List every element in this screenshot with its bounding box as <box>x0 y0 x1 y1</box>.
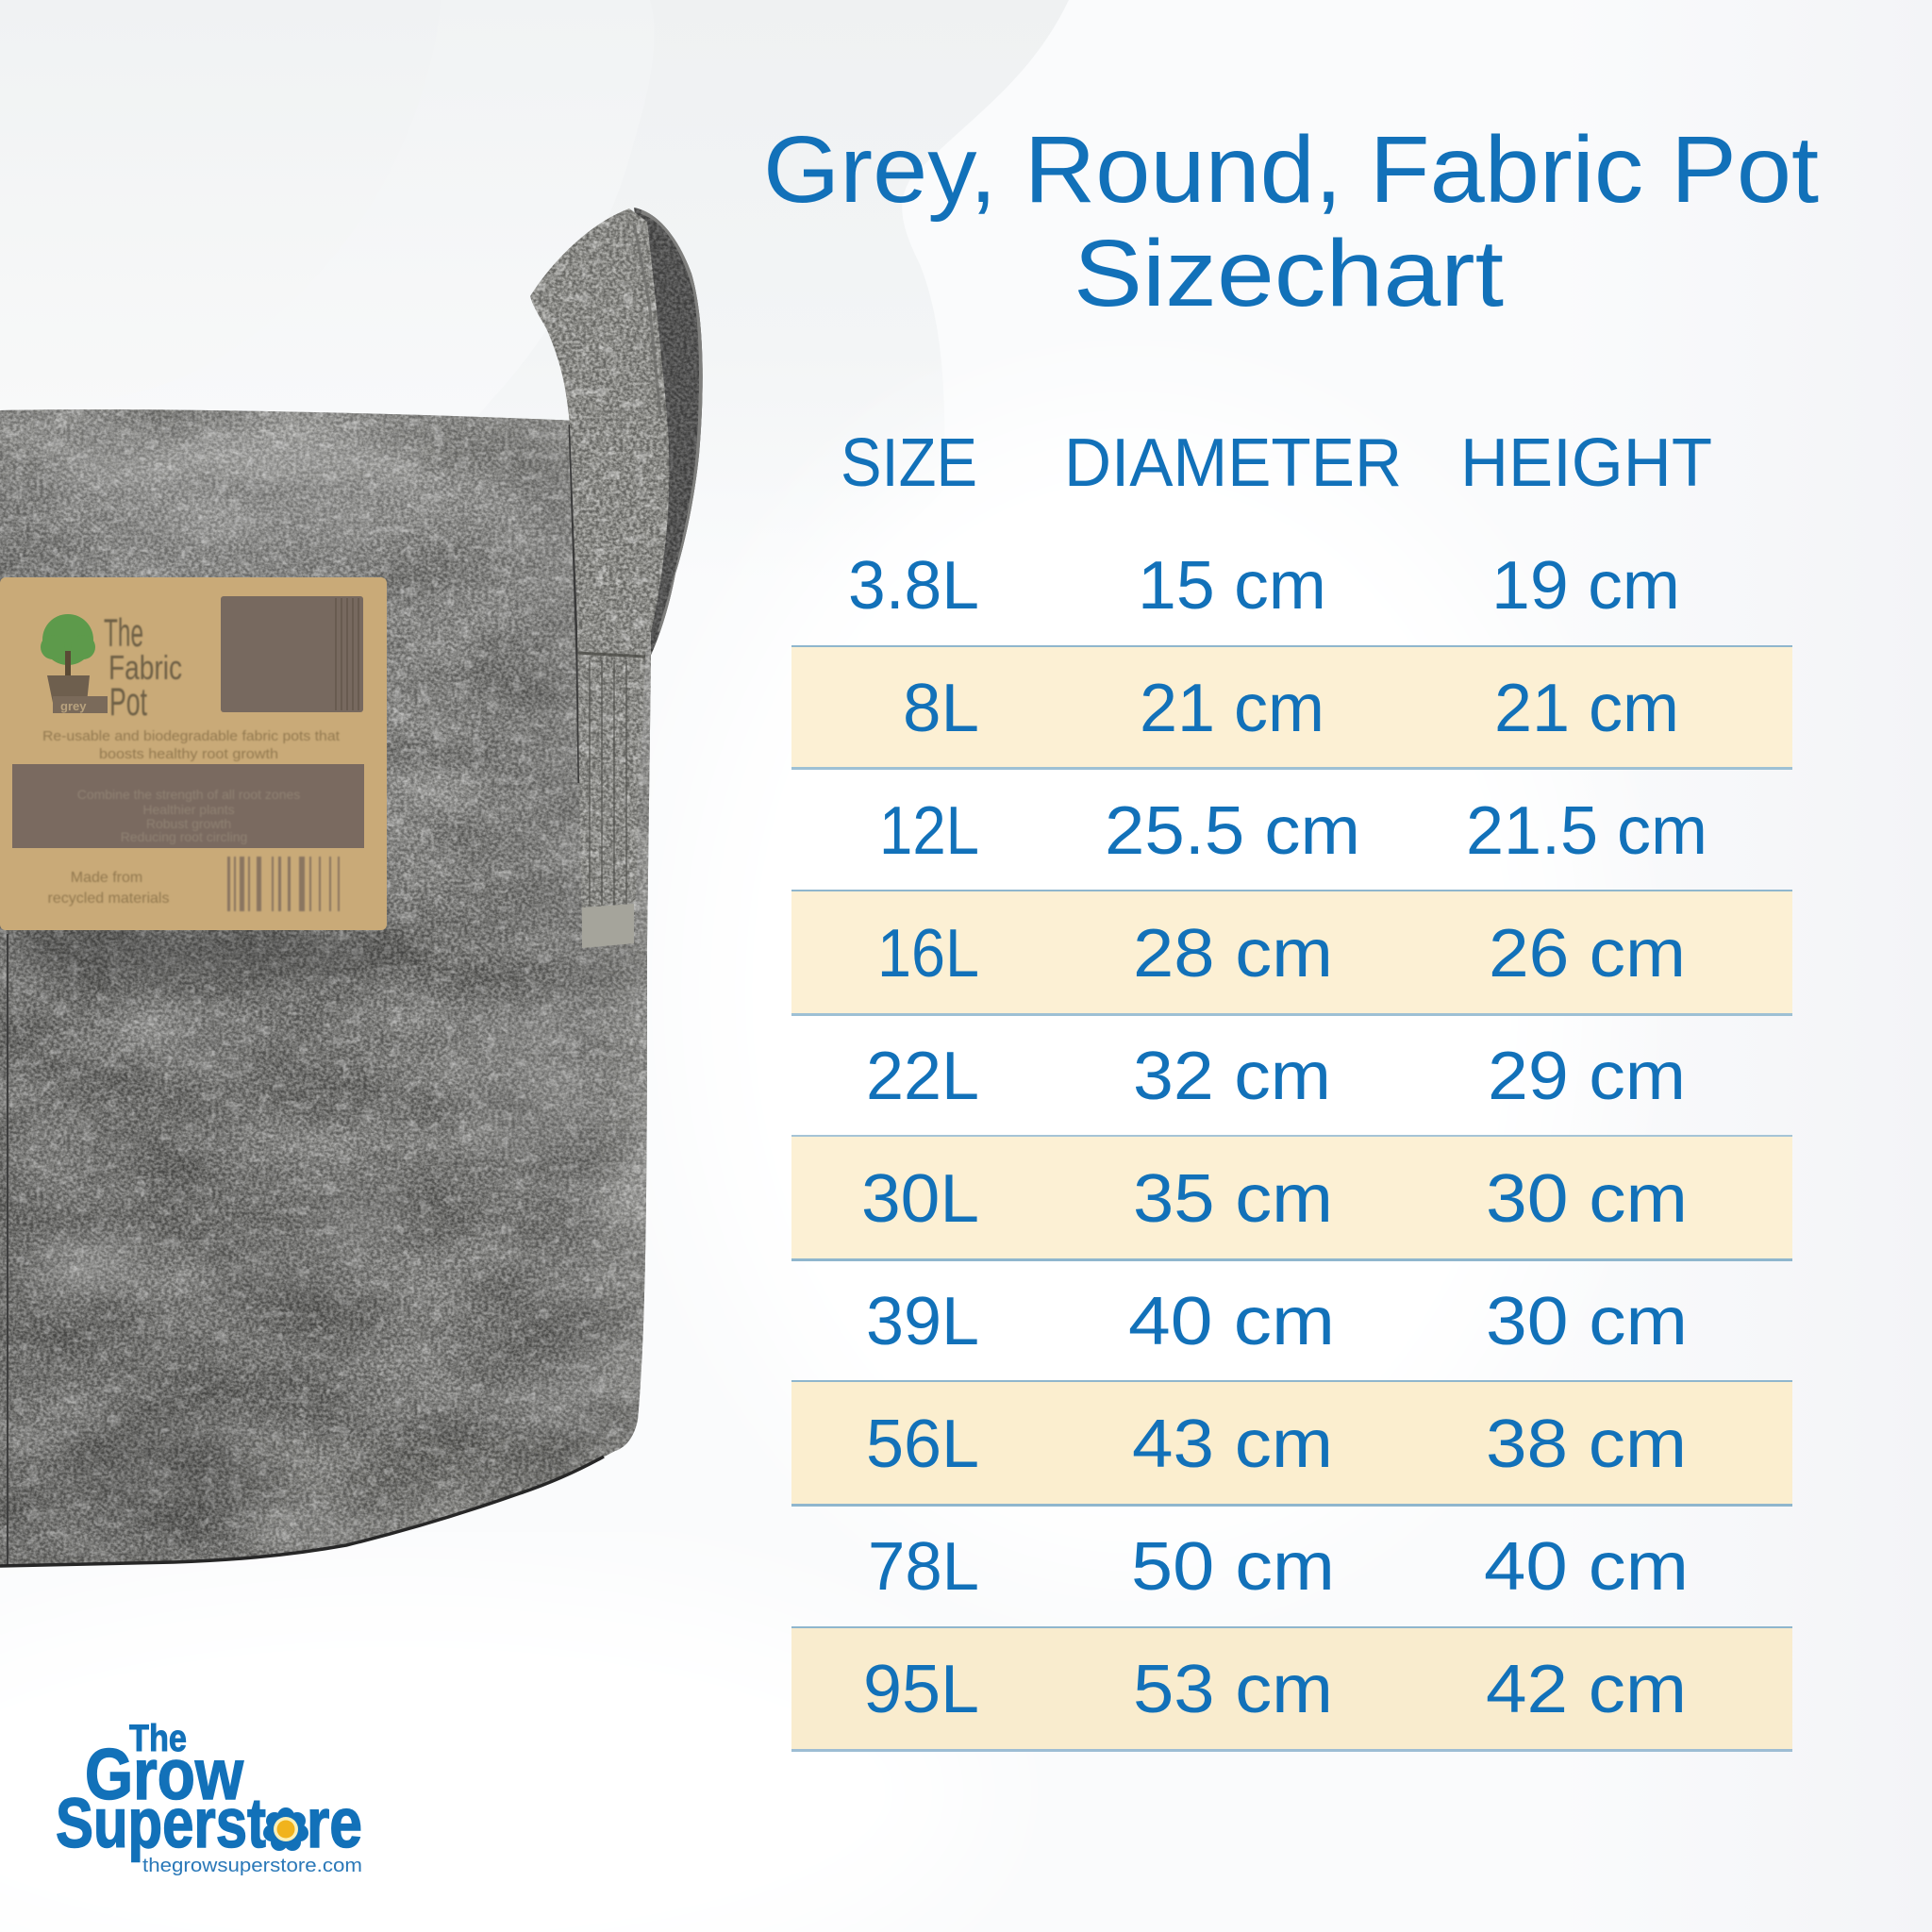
table row: 78L: 50 cm <box>1131 1529 1335 1605</box>
table row: 30L: 30 cm <box>1486 1161 1688 1237</box>
label benefit strip <box>12 764 364 848</box>
label benefit strip: Robust growth <box>146 816 231 831</box>
table row: 78L: 78L <box>868 1529 979 1605</box>
table row: 3.8L: 15 cm <box>1138 548 1326 624</box>
product label <box>0 577 387 930</box>
label brand name: Pot <box>109 679 147 724</box>
table row: 30L <box>791 1137 1792 1261</box>
label description <box>42 728 341 762</box>
table row: 22L <box>791 1039 1792 1138</box>
logo: The Grow Superstore <box>56 1718 362 1862</box>
table row: 30L: 35 cm <box>1133 1161 1333 1237</box>
table row: 56L: 43 cm <box>1132 1407 1333 1482</box>
table header: SIZE <box>841 425 977 501</box>
table row: 16L: 26 cm <box>1489 916 1686 991</box>
title: Grey, Round, Fabric Pot <box>763 117 1819 223</box>
label brand name <box>104 610 182 724</box>
table row: 12L: 25.5 cm <box>1105 793 1360 869</box>
table row: 95L: 42 cm <box>1486 1652 1687 1727</box>
title: Sizechart <box>1074 221 1504 326</box>
label brand name: The <box>104 610 143 655</box>
table row: 16L: 16L <box>877 916 979 991</box>
table header <box>841 425 1712 501</box>
table row: 39L: 30 cm <box>1486 1284 1688 1359</box>
fabric pot photo <box>0 203 712 1575</box>
logo: The Grow Superstore: re <box>307 1784 362 1862</box>
table row: 56L <box>791 1382 1792 1507</box>
table row: 78L: 40 cm <box>1484 1529 1689 1605</box>
table row: 3.8L: 3.8L <box>848 548 979 624</box>
label description: Re-usable and biodegradable fabric pots that <box>42 728 341 744</box>
table row: 16L <box>791 891 1792 1016</box>
label recycled note: Made from <box>71 870 142 886</box>
table row: 39L: 40 cm <box>1128 1284 1335 1359</box>
table row: 22L: 29 cm <box>1488 1039 1686 1114</box>
table row: 3.8L <box>791 548 1792 648</box>
pot handle strap <box>524 203 675 953</box>
table row: 12L: 12L <box>879 793 979 869</box>
table row: 30L: 30L <box>861 1161 979 1237</box>
table row: 56L: 56L <box>866 1407 979 1482</box>
label description: boosts healthy root growth <box>99 746 278 762</box>
table header: HEIGHT <box>1460 425 1712 501</box>
label tree logo <box>41 614 108 713</box>
pot body <box>0 406 660 1575</box>
logo url: thegrowsuperstore.com <box>142 1855 362 1876</box>
table row: 95L: 95L <box>863 1652 979 1727</box>
table row: 8L: 21 cm <box>1140 671 1324 746</box>
table row: 56L: 38 cm <box>1486 1407 1687 1482</box>
table header: DIAMETER <box>1064 425 1402 501</box>
label barcode <box>227 857 340 911</box>
table row: 3.8L: 19 cm <box>1491 548 1680 624</box>
strap shadow <box>571 425 580 783</box>
label brand name: Fabric <box>108 648 182 687</box>
table row: 39L: 39L <box>866 1284 979 1359</box>
pot handle back <box>634 208 703 655</box>
label benefit strip: Healthier plants <box>142 802 235 817</box>
table row: 8L <box>791 647 1792 770</box>
label recycled note <box>48 870 169 907</box>
table row: 95L: 53 cm <box>1133 1652 1333 1727</box>
label benefit strip: Combine the strength of all root zones <box>77 787 300 802</box>
icon: flower o <box>263 1807 308 1851</box>
table row: 22L: 32 cm <box>1133 1039 1331 1114</box>
logo: The Grow Superstore: Grow <box>85 1735 244 1815</box>
title <box>763 117 1819 326</box>
label benefit strip: Reducing root circling <box>121 829 247 844</box>
logo: The Grow Superstore: Superst <box>56 1784 266 1862</box>
table row: 22L: 22L <box>866 1039 979 1114</box>
label recycled note: recycled materials <box>48 891 169 907</box>
table row: 39L <box>791 1284 1792 1383</box>
table row: 8L: 21 cm <box>1494 671 1679 746</box>
table row: 95L <box>791 1628 1792 1752</box>
pot side seam <box>7 934 8 1566</box>
label tree logo: grey <box>60 699 87 713</box>
table row: 78L <box>791 1529 1792 1629</box>
logo: The Grow Superstore: The <box>129 1718 187 1759</box>
table row: 8L: 8L <box>903 671 979 746</box>
label dark square <box>221 596 363 712</box>
table row: 12L: 21.5 cm <box>1466 793 1707 869</box>
table row: 16L: 28 cm <box>1133 916 1333 991</box>
table row: 12L <box>791 793 1792 892</box>
pot bottom shadow edge <box>0 1457 604 1566</box>
